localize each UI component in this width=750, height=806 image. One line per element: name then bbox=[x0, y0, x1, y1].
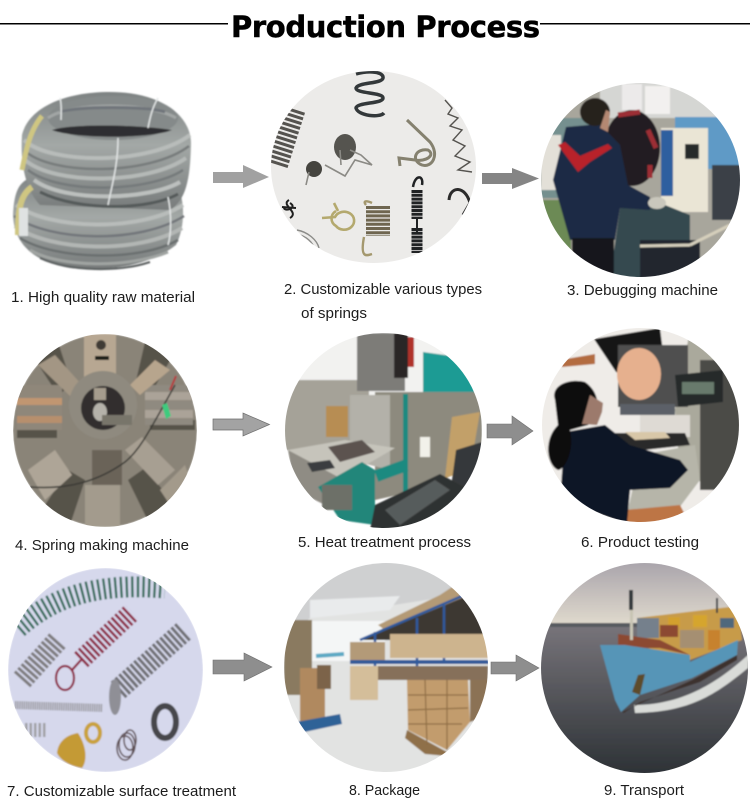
black coiling head bbox=[604, 110, 660, 186]
spring: gold clip bbox=[322, 203, 354, 230]
arrow 4 bbox=[487, 416, 533, 445]
photo: debugging machine bbox=[540, 80, 745, 280]
photo: heat treatment bbox=[284, 332, 484, 530]
machine base bbox=[610, 205, 690, 280]
labels: 7. Customizable surface treatment bbox=[7, 783, 237, 800]
photo: container ship bbox=[540, 562, 750, 775]
arrow 3 bbox=[213, 413, 270, 436]
spring: gold bbox=[57, 724, 100, 768]
projector hood bbox=[594, 328, 663, 373]
arrow 6 bbox=[491, 655, 539, 681]
title: Production Process bbox=[231, 10, 540, 44]
arrow 1 bbox=[213, 165, 269, 188]
oven body bbox=[288, 392, 482, 525]
spring: red with ring bbox=[56, 612, 132, 690]
spring: green bbox=[18, 587, 165, 628]
labels: of springs bbox=[301, 305, 367, 322]
spring: small black bbox=[282, 200, 296, 218]
photo: wire coils bbox=[13, 92, 191, 269]
radial slides bbox=[17, 334, 193, 527]
spring: black extension bbox=[413, 177, 422, 253]
pallet right bbox=[405, 680, 470, 756]
operator bbox=[548, 381, 688, 524]
photo: product testing bbox=[541, 327, 741, 524]
ship hull bbox=[600, 640, 738, 713]
ship wake bbox=[634, 655, 748, 713]
labels: 9. Transport bbox=[604, 782, 685, 799]
labels: 5. Heat treatment process bbox=[298, 534, 471, 551]
photo: spring making machine bbox=[13, 334, 197, 527]
labels: 8. Package bbox=[349, 782, 420, 799]
control cabinet bbox=[661, 128, 708, 212]
spring: silver cone bbox=[22, 640, 58, 680]
spring: brass extension bbox=[363, 201, 378, 255]
arrow 2 bbox=[482, 168, 539, 189]
spring: grey torsion bbox=[399, 120, 435, 166]
projector screen bbox=[617, 348, 661, 400]
arrow 5 bbox=[213, 653, 272, 681]
spring: dark small coil bbox=[117, 730, 136, 760]
labels: 1. High quality raw material bbox=[11, 289, 195, 306]
central hub bbox=[71, 370, 132, 430]
containers bbox=[618, 590, 742, 660]
photo: warehouse bbox=[282, 560, 490, 775]
spring: curved arcs bbox=[297, 230, 319, 252]
labels: 3. Debugging machine bbox=[567, 282, 718, 299]
labels: 6. Product testing bbox=[581, 534, 699, 551]
labels bbox=[7, 281, 718, 800]
operator bbox=[553, 98, 666, 280]
spring: thin long coil bbox=[445, 100, 472, 172]
spring: small silver bbox=[25, 723, 47, 737]
spring: top coil bbox=[356, 72, 384, 116]
pallet left bbox=[296, 654, 344, 733]
labels: 4. Spring making machine bbox=[15, 537, 189, 554]
shelving bbox=[350, 585, 490, 700]
spring: torsion pair bbox=[306, 134, 372, 185]
stage bbox=[615, 433, 690, 452]
photo: assorted springs bbox=[270, 70, 478, 265]
spring: black ring bbox=[154, 706, 176, 738]
spring: silver with base bbox=[109, 630, 185, 715]
spring: left coil bbox=[278, 108, 296, 165]
spring: thin straight bbox=[15, 705, 103, 708]
labels: 2. Customizable various types bbox=[284, 281, 482, 298]
digital readout bbox=[675, 370, 723, 407]
spring: black hook bbox=[449, 189, 470, 215]
photo: surface treated springs bbox=[8, 568, 203, 772]
